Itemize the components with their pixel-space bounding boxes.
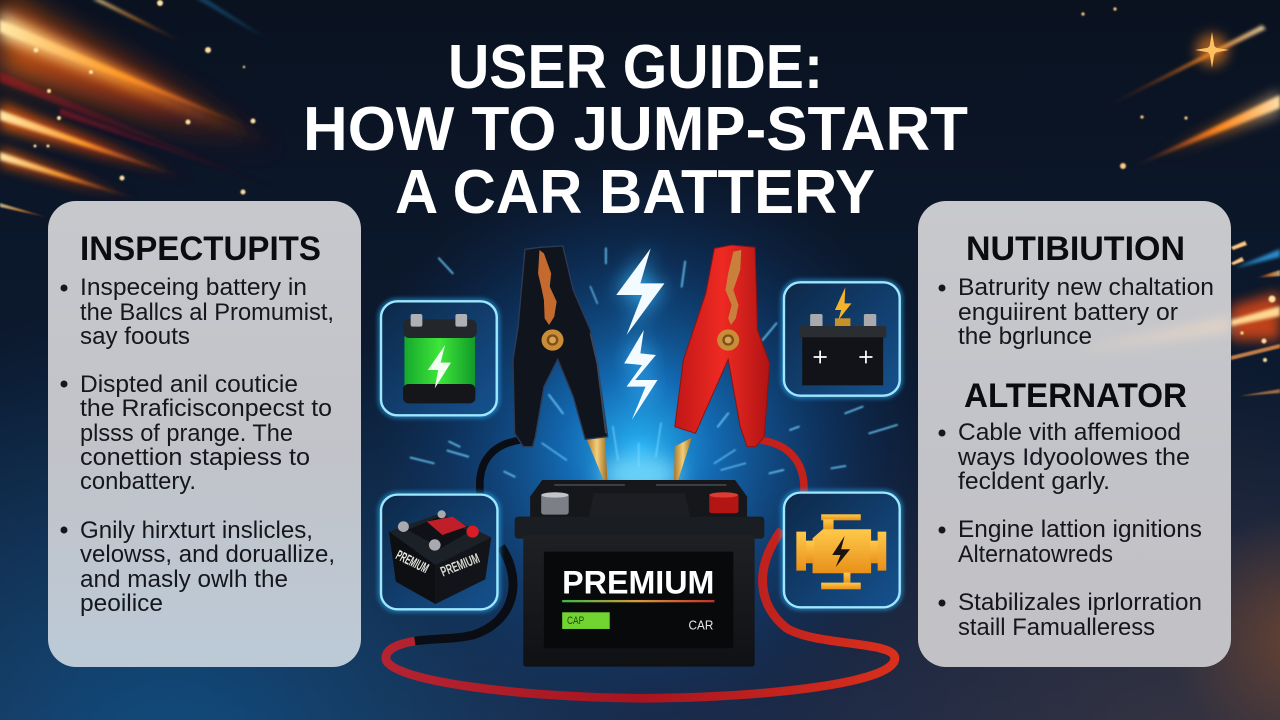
bullet group 2: the Rraficisconpecst to [80,395,332,422]
title [303,33,968,227]
panel: right nutribution and alternator [918,201,1231,667]
bullet group 2: fecldent garly. [958,468,1110,495]
bullet group 1: Batrurity new chaltation [958,274,1214,301]
bullet group 4: Stabilizales iprlorration [958,589,1202,616]
bullet group 2: conettion stapiess to [80,444,310,471]
icon tile: terminals battery [784,282,900,396]
bullet group 2: plsss of prange. The [80,420,293,447]
bullet group 2: conbattery. [80,468,196,495]
battery label: CAR [689,617,713,632]
heading: nutibiution: NUTIBIUTION [966,230,1185,268]
title: A CAR BATTERY [395,158,875,227]
central glow [601,455,680,495]
bullet group 2: Dispted anil couticie [80,371,298,398]
black cable upper [480,440,522,493]
bullet group 4: staill Famualleress [958,614,1155,641]
bullet group 1: say foouts [80,323,190,350]
battery label: CAP [567,615,584,627]
bullet group 3 [938,516,1202,568]
bullet group 1: enguiirent battery or [958,299,1178,326]
bullet group 2 [60,371,332,495]
heading: alternator: ALTERNATOR [964,377,1187,415]
sparks [34,0,256,194]
red clamp [674,245,770,485]
battery label: PREMIUM [562,565,714,601]
title: HOW TO JUMP-START [303,95,968,164]
bullet group 3: Alternatowreds [958,541,1113,568]
icon tile: premium battery: PREMIUM [438,551,482,580]
sparks [411,248,897,477]
bullet group 2: ways Idyoolowes the [957,444,1190,471]
bullet group 3: and masly owlh the [80,566,288,593]
bullet group 1: the Ballcs al Promumist, [80,299,334,326]
heading: inspect: INSPECTUPITS [80,230,321,268]
bullet group 3: peoilice [80,590,163,617]
bullet group 1: the bgrlunce [958,323,1092,350]
icon tile: engine [784,493,900,607]
bullet group 3: Gnily hirxturt inslicles, [80,517,313,544]
red cable upper [759,440,804,493]
orange light streaks top left [0,0,290,218]
light streak through panel [1070,316,1231,352]
icon tile: premium battery: PREMIUM [393,548,431,577]
jumper cable loop [386,530,895,698]
bullet group 3: Engine lattion ignitions [958,516,1202,543]
bullet group 4 [938,589,1202,641]
bullet group 1: Inspeceing battery in [80,274,307,301]
terminals [541,492,739,518]
orange light streaks top right [1081,7,1280,396]
panel: left inspect points [48,201,361,667]
central illustration [381,245,900,698]
bullet group 3 [60,517,335,617]
lightning bolts [616,248,664,420]
battery label [544,552,733,648]
main battery [515,480,764,667]
icon tile: green battery [381,301,497,415]
bullet group 1 [60,274,334,350]
bullet group 1 [938,274,1214,350]
black clamp [513,246,608,485]
bullet group 2: Cable vith affemiood [958,419,1181,446]
icon tile: premium battery [381,495,497,609]
bullet group 2 [938,419,1190,495]
title: USER GUIDE: [448,33,823,102]
bullet group 3: velowss, and doruallize, [80,541,335,568]
